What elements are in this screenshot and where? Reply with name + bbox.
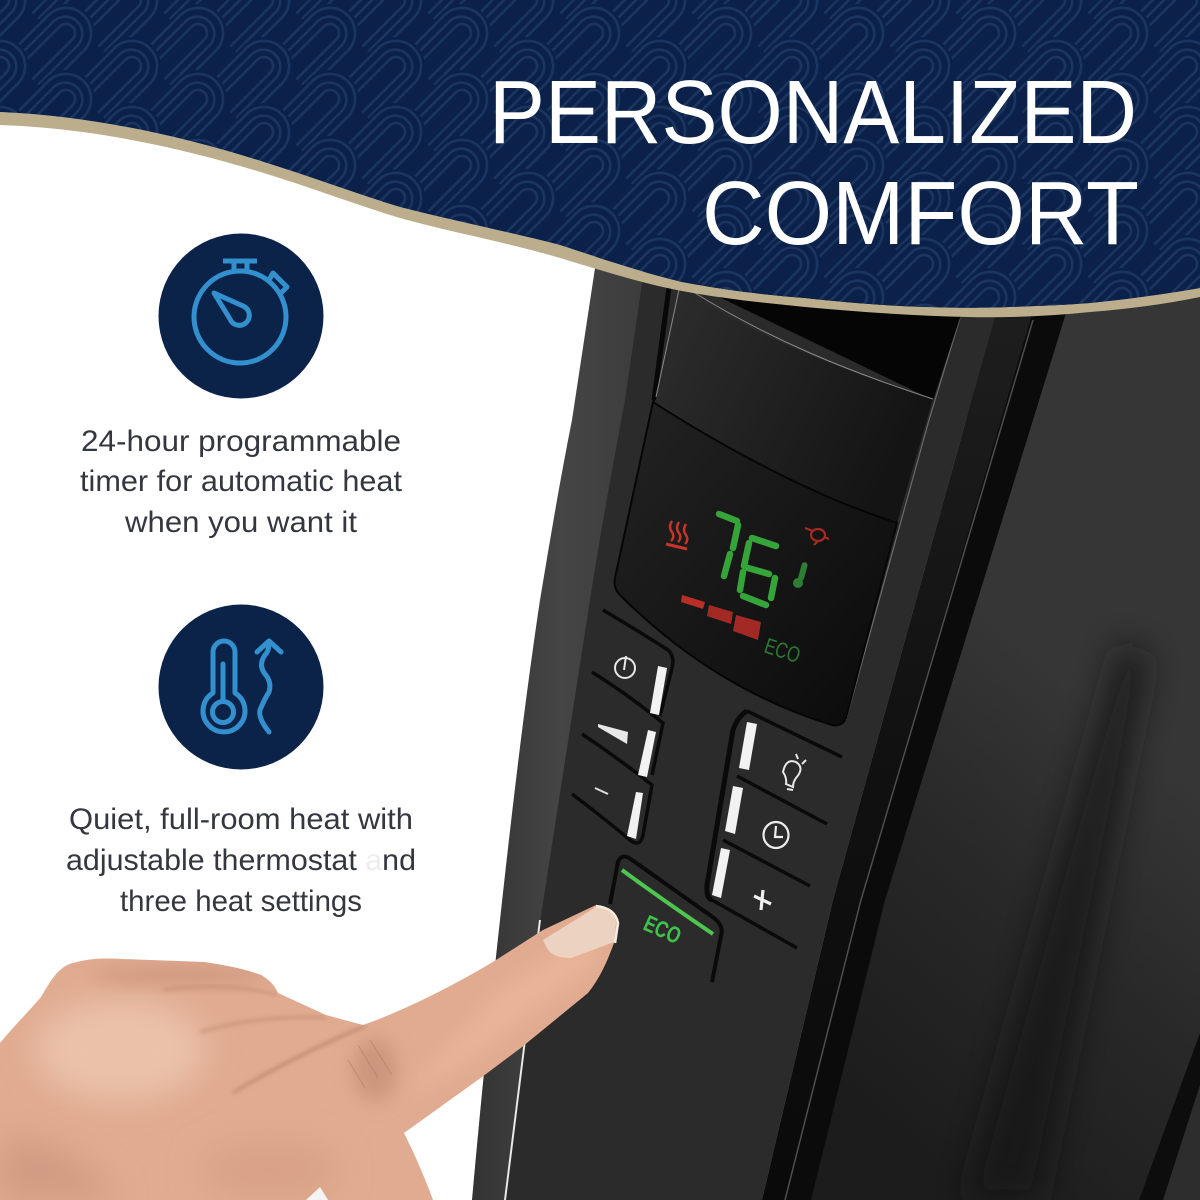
white bars xyxy=(739,722,757,770)
text: heat: adjustable thermostat and xyxy=(66,844,416,877)
heater dark corner xyxy=(1139,1033,1200,1200)
text: timer: timer for automatic heat xyxy=(80,465,403,498)
text: heat: three heat settings xyxy=(120,885,362,918)
display: thermometer icon xyxy=(793,562,808,588)
icon: fan speed xyxy=(598,724,628,744)
thumb gap xyxy=(306,1187,328,1200)
heater right side panel xyxy=(780,280,1200,1200)
icon: power xyxy=(615,656,635,678)
title xyxy=(489,63,1139,264)
left highlight line xyxy=(505,920,540,1200)
icon: bulb xyxy=(783,754,806,790)
lower left shadow xyxy=(2,1142,96,1200)
knuckle row shadow xyxy=(90,965,270,985)
flap highlight xyxy=(656,285,933,399)
index finger crease xyxy=(233,1026,365,1093)
ring finger crease xyxy=(200,1017,326,1032)
void behind flap xyxy=(684,280,962,400)
icon: stopwatch xyxy=(158,234,324,398)
back of hand highlight xyxy=(35,1000,205,1100)
hand shading xyxy=(2,956,578,1200)
middle finger crease xyxy=(163,987,278,995)
hand base xyxy=(0,905,618,1200)
display: plug icon xyxy=(805,528,829,545)
channel upper strip xyxy=(762,300,1036,1200)
wrist mid shadow xyxy=(229,1156,311,1184)
far right corner panel xyxy=(1163,1085,1200,1200)
frame line xyxy=(846,318,960,720)
channel highlight line xyxy=(785,320,1033,1200)
heater left band xyxy=(472,255,650,1200)
navy patterned banner xyxy=(0,0,1200,308)
left buttons xyxy=(572,610,673,843)
ECO label: ECO xyxy=(640,910,685,949)
wave banner xyxy=(0,0,1200,317)
white bars xyxy=(650,666,667,715)
fingernail xyxy=(543,907,616,958)
right buttons xyxy=(707,711,842,948)
left groove xyxy=(707,711,747,900)
icon: clock xyxy=(764,822,788,848)
text: heat: Quiet, full-room heat with xyxy=(69,803,413,836)
display panel xyxy=(615,402,897,725)
grooves xyxy=(572,610,673,843)
right panel soft shadow xyxy=(965,640,1150,1200)
grooves xyxy=(712,711,842,948)
heater control face xyxy=(505,270,997,1200)
display: heat level bars xyxy=(681,595,761,640)
gold stripe xyxy=(0,112,1200,317)
icon: plus xyxy=(754,890,771,910)
green light bar xyxy=(622,870,713,934)
nail tip xyxy=(596,906,618,943)
text: timer xyxy=(80,425,403,539)
heater black channel xyxy=(762,300,1070,1200)
text: timer: when you want it xyxy=(124,506,358,539)
display: temperature 76 xyxy=(719,514,776,605)
icon: thermometer and rising heat xyxy=(158,604,324,770)
icon: minus xyxy=(595,788,608,794)
ECO button xyxy=(610,856,722,982)
display flap xyxy=(656,287,933,523)
text: timer: 24-hour programmable xyxy=(81,425,401,458)
title line 2: COMFORT xyxy=(702,164,1139,264)
knuckle shadow xyxy=(353,1038,397,1102)
button outline xyxy=(610,856,722,982)
display: ECO label: ECO xyxy=(761,633,803,668)
text: heat xyxy=(66,803,416,918)
left groove xyxy=(654,280,670,400)
index finger highlight xyxy=(486,956,578,1029)
left groove lower xyxy=(616,400,654,580)
knuckle wrinkles xyxy=(348,1040,392,1088)
display: heat icon xyxy=(666,521,687,549)
heater xyxy=(472,255,1200,1200)
hand xyxy=(0,905,618,1200)
title line 1: PERSONALIZED xyxy=(489,63,1137,163)
